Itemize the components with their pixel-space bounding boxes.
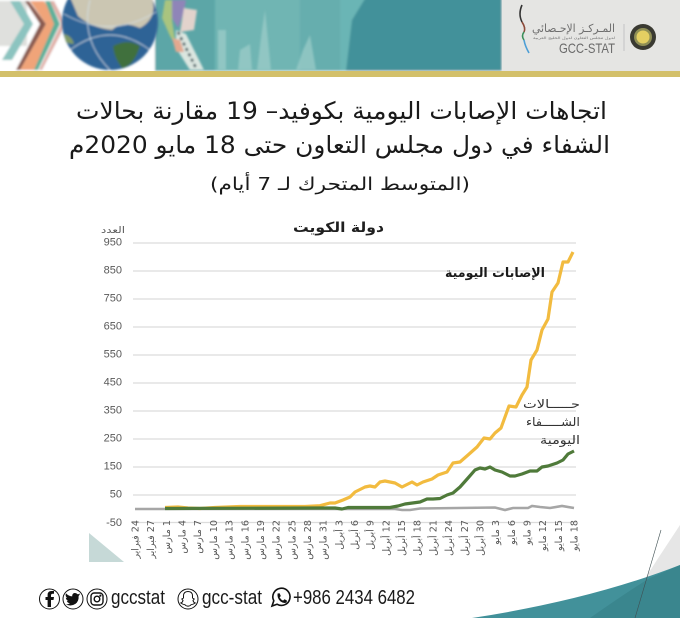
- x axis date labels: 15 أبريل: [395, 520, 408, 556]
- logo subline: لدول مجلس التعاون لدول الخليج العربية: [533, 36, 615, 40]
- logo wordmark: GCC-STAT: [559, 40, 615, 56]
- ship collage: [162, 0, 204, 70]
- y axis labels: 850: [104, 264, 122, 276]
- x axis date labels: 27 فبراير: [146, 520, 157, 560]
- series: gray line: [135, 506, 574, 510]
- logo ribbon: [520, 5, 529, 53]
- y axis labels: [104, 236, 122, 529]
- x axis date labels: 12 مايو: [538, 520, 549, 552]
- banner artwork: [0, 0, 680, 75]
- globe: [62, 0, 158, 70]
- x axis date labels: 27 أبريل: [458, 520, 471, 556]
- x axis date labels: 24 أبريل: [442, 520, 455, 556]
- x axis date labels: 9 مايو: [522, 520, 534, 546]
- y axis labels: 150: [104, 460, 122, 472]
- footer swoosh: [472, 525, 680, 618]
- decorative corner triangle: [89, 533, 124, 562]
- x axis date labels: 18 مايو: [570, 520, 580, 552]
- icon: twitter: [63, 589, 83, 609]
- line chart: [101, 220, 580, 560]
- x axis date labels: 19 مارس: [256, 520, 267, 560]
- x axis date labels: 3 أبريل: [332, 520, 345, 550]
- x axis date labels: 30 أبريل: [474, 520, 486, 556]
- x axis date labels: 16 مارس: [240, 520, 251, 560]
- label: daily recoveries: الشـــــفاء: [526, 415, 580, 429]
- x axis date labels: 25 مارس: [287, 520, 298, 560]
- x axis date labels: 7 مارس: [193, 520, 204, 554]
- logo: GCC-STAT: [520, 5, 656, 56]
- x axis date labels: 6 مايو: [507, 520, 518, 546]
- title: [69, 97, 610, 195]
- x axis date labels: 12 أبريل: [379, 520, 392, 556]
- x axis date labels: 22 مارس: [272, 520, 283, 560]
- x axis date labels: 21 أبريل: [426, 520, 439, 556]
- x axis date labels: 1 مارس: [162, 520, 173, 554]
- title line 2: الشفاء في دول مجلس التعاون حتى 18 مايو 2020م: [69, 131, 610, 159]
- y axis labels: 50: [110, 488, 122, 500]
- y axis labels: 650: [104, 320, 122, 332]
- chart title: دولة الكويت: [293, 220, 384, 236]
- emblem: [630, 24, 656, 50]
- x axis date labels: 15 مايو: [554, 520, 565, 552]
- phone number: +986 2434 6482: [293, 587, 415, 609]
- y axis labels: 750: [104, 292, 122, 304]
- series: daily recoveries: [165, 451, 574, 509]
- y axis labels: 450: [104, 376, 122, 388]
- icon: instagram: [87, 589, 107, 609]
- x axis date labels: 9 أبريل: [364, 520, 377, 550]
- x axis date labels: 6 أبريل: [348, 520, 361, 550]
- skyline: [218, 10, 316, 70]
- x axis date labels: 24 فبراير: [130, 520, 142, 560]
- header banner: [0, 0, 680, 77]
- x axis date labels: 18 أبريل: [411, 520, 424, 556]
- label: daily infections: الإصابات اليومية: [445, 266, 545, 281]
- x axis date labels: 4 مارس: [178, 520, 188, 554]
- social contact row: [40, 587, 415, 609]
- series: daily infections: [165, 252, 573, 508]
- y axis labels: 250: [104, 432, 122, 444]
- handle: gccstat: gccstat: [111, 587, 165, 609]
- y axis labels: 550: [104, 348, 122, 360]
- x axis date labels: 28 مارس: [303, 520, 314, 560]
- x axis date labels: 3 مايو: [491, 520, 502, 546]
- icon: snapchat: [178, 589, 198, 609]
- x axis date labels: 13 مارس: [225, 520, 236, 560]
- icon: whatsapp: [272, 588, 290, 606]
- x axis date labels: 31 مارس: [319, 520, 330, 560]
- label: daily recoveries: حـــــالات: [523, 397, 580, 411]
- title line 1: اتجاهات الإصابات اليومية بكوفيد– 19 مقارنة بحالات: [76, 97, 607, 125]
- logo arabic name: المـركـز الإحـصائي: [532, 22, 615, 35]
- label: daily recoveries: [523, 397, 580, 448]
- y axis labels: 950: [104, 236, 122, 248]
- y axis unit: العدد: [101, 226, 125, 236]
- y axis labels: -50: [106, 517, 122, 529]
- x axis date labels: 10 مارس: [209, 520, 220, 560]
- x axis date labels: [130, 520, 580, 560]
- y axis labels: 350: [104, 404, 122, 416]
- handle: gcc-stat: gcc-stat: [202, 587, 262, 609]
- gold bar: [0, 71, 680, 77]
- icon: facebook: [40, 589, 60, 609]
- label: daily recoveries: اليومية: [540, 433, 580, 448]
- subtitle: (المتوسط المتحرك لـ 7 أيام): [210, 172, 470, 195]
